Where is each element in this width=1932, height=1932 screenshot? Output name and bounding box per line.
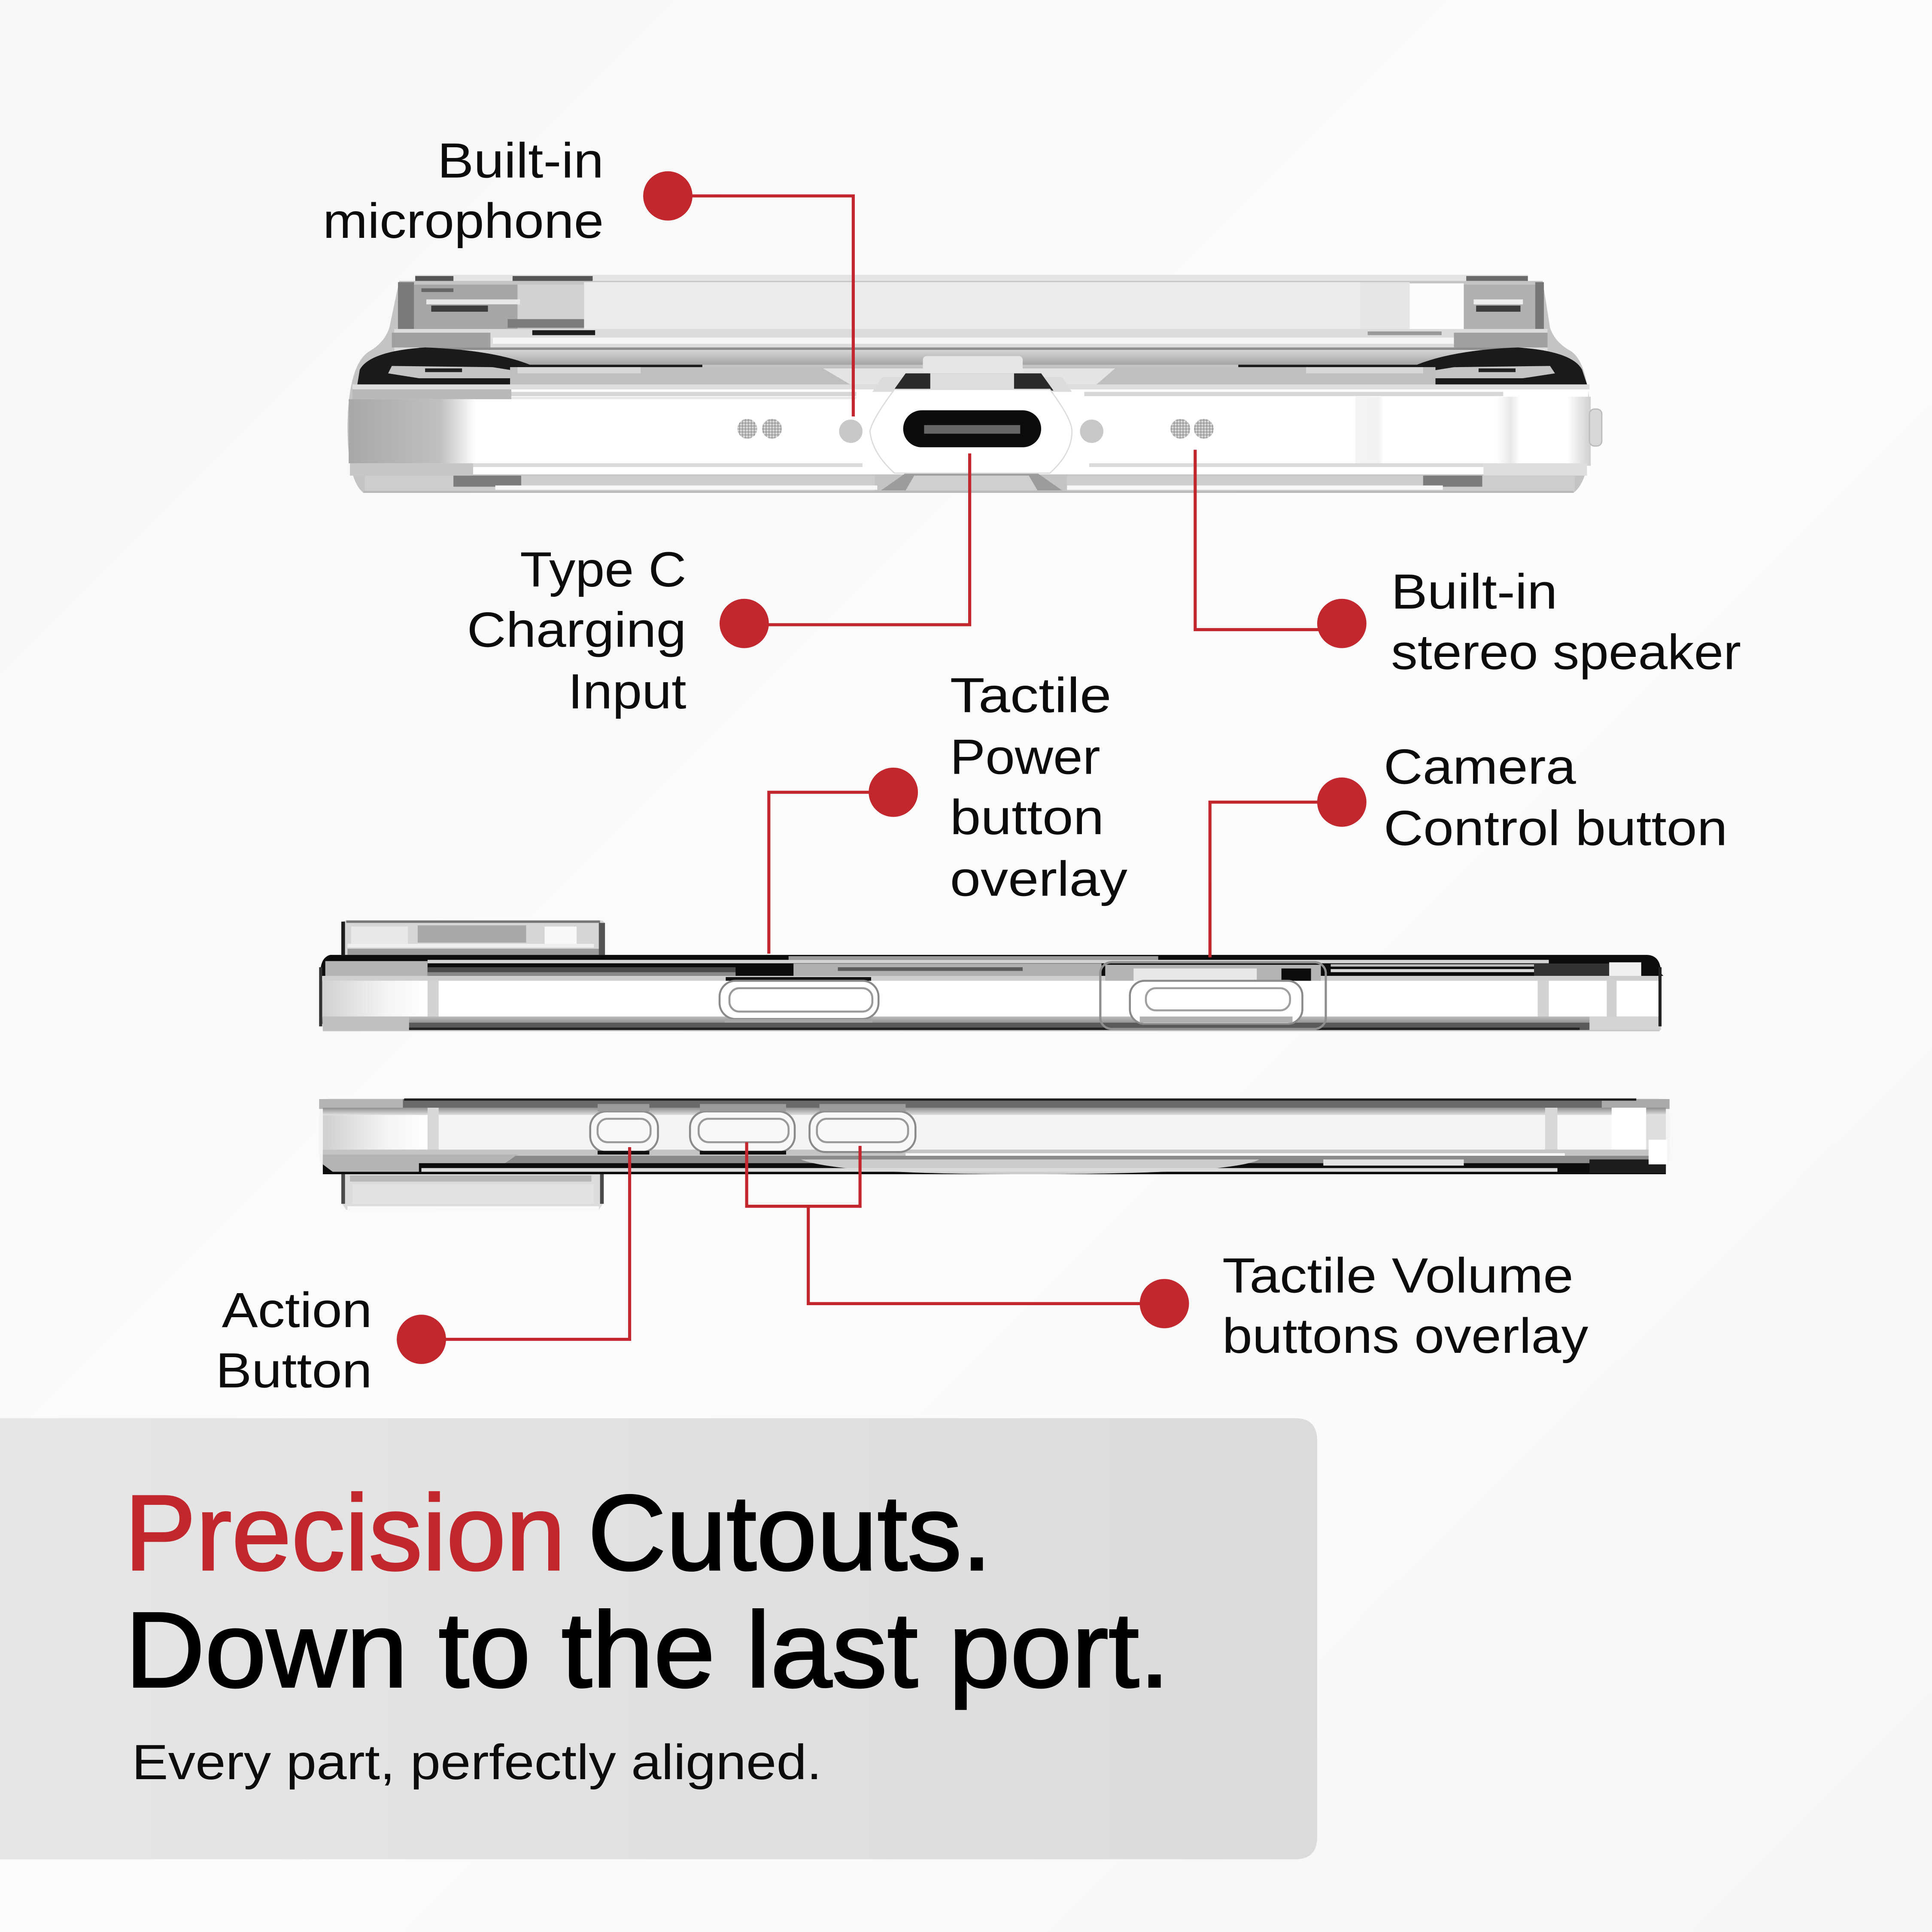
lower lip (364, 473, 1575, 493)
label: Tactile (950, 668, 1112, 723)
label: Built-in (1391, 565, 1558, 620)
marker dot (869, 768, 918, 817)
label: Power (950, 729, 1100, 784)
marker dot (643, 171, 693, 221)
marker dot (720, 599, 769, 648)
usb-c port (903, 410, 1041, 447)
title: Cutouts. (588, 1473, 992, 1592)
right side shading (1355, 397, 1591, 466)
label: Charging (467, 603, 687, 658)
label: Tactile Volume (1222, 1249, 1574, 1303)
subtitle: Every part, perfectly aligned. (132, 1735, 822, 1790)
upper lip glass (392, 275, 1548, 351)
marker dot (397, 1315, 446, 1364)
bottom dark rail (323, 1017, 1661, 1031)
label: microphone (323, 194, 604, 249)
top dark rail (319, 955, 1663, 976)
top rail ends (319, 1099, 1670, 1109)
camera bump (341, 1173, 604, 1210)
leader line (1210, 802, 1342, 957)
callout: microphone (323, 133, 853, 416)
power button overlay (720, 981, 878, 1023)
thin light strip (428, 960, 1549, 963)
near-white face (323, 1115, 1666, 1150)
leader line (744, 453, 970, 625)
title: Precision (125, 1473, 565, 1592)
label: Action (222, 1283, 372, 1338)
camera control overlay (1100, 962, 1326, 1029)
leader line (422, 1147, 630, 1340)
camera bump (341, 920, 605, 959)
callout: type c port (467, 453, 970, 719)
case silhouette (347, 275, 1591, 493)
label: buttons overlay (1222, 1309, 1589, 1364)
upper band reflections (323, 956, 1660, 981)
action button (590, 1104, 658, 1154)
end accents (323, 1108, 1666, 1157)
speaker holes (738, 419, 1214, 439)
microphone holes (839, 419, 1103, 443)
callout: action button (216, 1147, 630, 1398)
left and right vertical accents (322, 981, 1616, 1023)
marker dot (1317, 778, 1367, 827)
dark lower band (323, 1156, 1666, 1163)
port surround tab (872, 356, 1072, 392)
callout: volume buttons (747, 1142, 1589, 1364)
body silhouette (319, 955, 1661, 1031)
panel background (0, 1418, 1317, 1859)
marker dot (1140, 1279, 1189, 1328)
callout: camera control (1210, 739, 1728, 957)
phone case: right side view (319, 920, 1663, 1031)
port housing (870, 389, 1072, 473)
label: Button (216, 1343, 372, 1398)
title: Down to the last port. (125, 1590, 1170, 1710)
volume down button (810, 1104, 915, 1152)
volume up button (690, 1104, 795, 1154)
label: Camera (1384, 739, 1576, 794)
white strip (905, 1153, 1565, 1156)
leader line (769, 792, 893, 954)
white face (322, 981, 1660, 1017)
mid band highlights (352, 367, 1589, 389)
label: stereo speaker (1391, 625, 1741, 680)
white front face (356, 389, 1588, 474)
phone case: left side view (319, 1098, 1670, 1210)
callout: power button (769, 668, 1128, 954)
label: Input (568, 664, 687, 719)
label: overlay (950, 851, 1128, 906)
label: button (950, 790, 1104, 845)
phone case: bottom edge view (347, 275, 1602, 493)
label: Type C (520, 542, 687, 597)
leader line (668, 196, 853, 416)
marker dot (1317, 599, 1367, 648)
callout: stereo speaker (1195, 450, 1741, 680)
leader line (1195, 450, 1342, 630)
lower shade (322, 1017, 1660, 1024)
dark shoulder reflections (357, 347, 1587, 384)
leader line (747, 1142, 1164, 1303)
side edges (319, 967, 1662, 1027)
side bump (1589, 409, 1602, 446)
shade below rail (323, 1108, 1666, 1115)
face lower stripes (350, 463, 1587, 476)
label: Built-in (437, 133, 604, 188)
face upper stripes (352, 389, 1503, 399)
black rail with light strip (323, 1140, 1667, 1174)
label: Control button (1384, 801, 1728, 856)
panel: headline (0, 1418, 1317, 1859)
left side shading (349, 399, 476, 463)
mid grey band (510, 367, 1435, 384)
top grey rail (323, 1099, 1666, 1108)
lower grey band (323, 1150, 1666, 1156)
body silhouette (319, 1098, 1670, 1174)
